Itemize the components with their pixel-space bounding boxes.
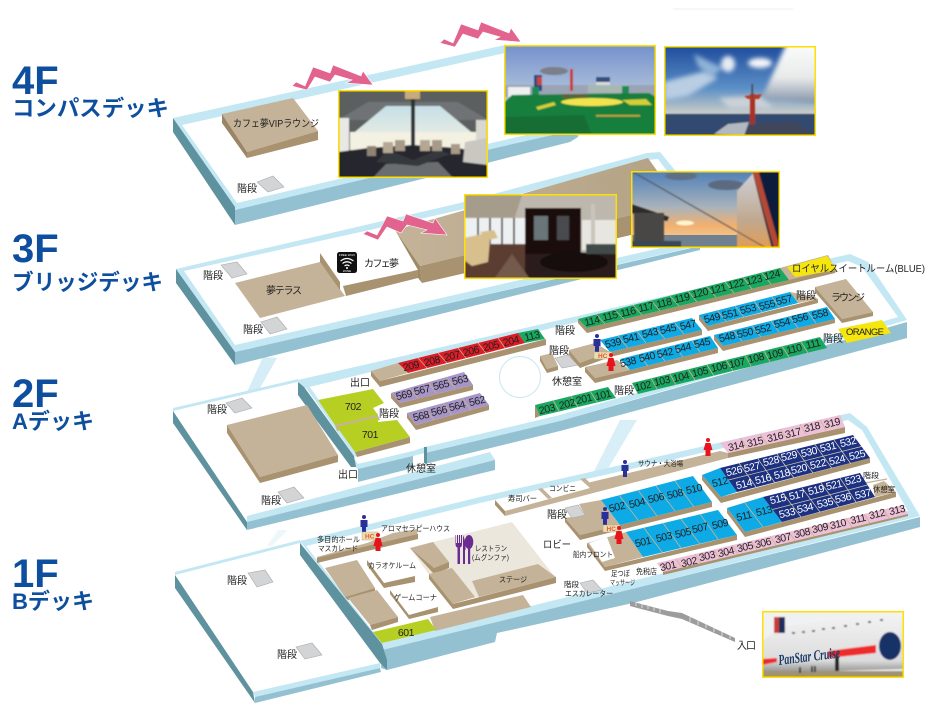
1F labels: 階段 <box>564 579 579 589</box>
arrow: to deck photos <box>440 22 521 47</box>
cabin block 511-537: 536 <box>834 491 853 506</box>
red row 209-204 with 113 <box>371 329 546 387</box>
1F labels: マスカレード <box>318 544 358 553</box>
room 601 <box>373 619 436 643</box>
support strut 3F to 2F <box>247 357 277 392</box>
blue row 548-558: 558 <box>811 307 830 322</box>
deck: 1F B deck <box>175 413 920 703</box>
support strut 2F to 1F left <box>267 530 288 546</box>
green row 102-111: 106 <box>710 360 729 375</box>
green row 102-111: 109 <box>766 347 785 362</box>
block 501-509: 507 <box>691 521 710 536</box>
blue row 549-557: 555 <box>758 298 777 313</box>
green row 114-124 with royal suite: 119 <box>673 291 692 306</box>
blue row 538-545 <box>585 336 718 383</box>
pink row 301-313: 304 <box>717 545 736 560</box>
blue row 538-545: 540 <box>638 350 657 365</box>
1F labels: サウナ・大浴場 <box>638 458 683 468</box>
cabin block 512 and 514-532: 524 <box>828 453 847 468</box>
heading: 2F: Aデッキ <box>12 409 94 434</box>
blue row 538-545: 538 <box>619 355 638 370</box>
deck: 4F compass deck <box>173 45 590 225</box>
sushi bar and convenience store strip <box>495 451 728 516</box>
pink row 301-313: 303 <box>698 549 717 564</box>
cafe yume room <box>320 230 418 296</box>
purple row 569-563: 569 <box>395 388 414 403</box>
lounge block <box>815 279 873 323</box>
pink row 314-319: 319 <box>823 416 842 431</box>
1F labels: マッサージ <box>610 578 635 587</box>
large beige block <box>227 405 338 483</box>
block 501-509: 503 <box>655 530 674 545</box>
cabin block 511-537: 519 <box>807 483 826 498</box>
cafe back block <box>395 158 660 283</box>
green row 102-111: 103 <box>653 374 672 389</box>
beige rooms 1F <box>317 529 556 631</box>
blue row 548-558: 556 <box>791 311 810 326</box>
block 502-510: 506 <box>647 491 666 506</box>
1F labels: ゲームコーナ <box>394 593 437 602</box>
green row 102-111: 108 <box>747 351 766 366</box>
heading: 3F: 3F <box>12 227 59 271</box>
1F labels: 多目的ホール <box>317 534 360 544</box>
pink row 301-313: 305 <box>736 540 755 555</box>
arrow: to VIP lounge photo <box>292 65 373 90</box>
purple row 568-562: 568 <box>412 409 431 424</box>
2F main deck structure <box>298 254 907 482</box>
1F labels: 船内フロント <box>573 549 613 559</box>
cabin block 512 and 514-532: 529 <box>780 449 799 464</box>
pink row 314-319: 314 <box>727 439 746 454</box>
blue row 538-545: 542 <box>656 346 675 361</box>
VIP lounge block <box>222 98 319 158</box>
block 502-510: 502 <box>608 500 627 515</box>
red row 209-204 with 113: 207 <box>443 349 462 364</box>
2F labels <box>207 263 925 507</box>
3F labels: 階段 <box>243 323 263 336</box>
small block by stairs <box>540 353 558 373</box>
2F labels: 休憩室 <box>552 375 582 388</box>
red row 209-204 with 113: 113 <box>523 329 542 344</box>
2F labels: 階段 <box>796 289 816 302</box>
pink row 301-313: 312 <box>868 507 887 522</box>
green row 203-101: 201 <box>575 392 594 407</box>
heading: 4F <box>12 59 169 121</box>
green row 114-124 with royal suite: 124 <box>763 268 782 283</box>
pink row 314-319: 317 <box>784 426 803 441</box>
heading: 2F: 2F <box>12 372 59 416</box>
block 502-510: 504 <box>628 496 647 511</box>
cabin block 512 and 514-532: 520 <box>790 462 809 477</box>
pink row 301-313: 311 <box>849 512 868 527</box>
blue row 548-558 <box>714 307 835 351</box>
red row 209-204 with 113: 208 <box>423 354 442 369</box>
restaurant floor <box>410 522 555 604</box>
block 502-510 <box>565 476 712 540</box>
photo: cafe interior <box>459 189 622 284</box>
pink row 314-319: 318 <box>803 420 822 435</box>
cabin block 512 and 514-532: 527 <box>743 460 762 475</box>
cabin block 512 and 514-532: 531 <box>819 440 838 455</box>
1F labels: 階段 <box>863 470 880 480</box>
cabin block 512 and 514-532: 518 <box>773 467 792 482</box>
lounge block: ラウンジ <box>831 292 865 304</box>
cabin block 512 and 514-532: 528 <box>762 454 781 469</box>
blue row 549-557 <box>699 292 818 331</box>
pink row 301-313: 302 <box>680 555 699 570</box>
cabin block 512 and 514-532: 522 <box>809 457 828 472</box>
green row 102-111: 107 <box>728 356 747 371</box>
green row 102-111: 111 <box>805 337 822 352</box>
pink row 301-313: 308 <box>793 526 812 541</box>
cabin block 512 and 514-532: 525 <box>848 448 867 463</box>
2F labels: 階段 <box>379 407 399 420</box>
heading: 1F <box>12 552 94 614</box>
pink row 314-319: 316 <box>766 430 785 445</box>
green row 114-124 with royal suite: 115 <box>601 309 620 324</box>
support strut 2F to 1F <box>592 420 637 475</box>
blue row 539-547: 541 <box>622 331 641 346</box>
1F labels: アロマセラピーハウス <box>381 524 450 533</box>
blue row 539-547: 547 <box>679 318 698 333</box>
stairs 3F <box>221 262 287 334</box>
deck: 3F bridge deck <box>176 152 720 365</box>
rooms 702 and 701: 702 <box>345 401 362 413</box>
block 502-510: 508 <box>666 487 685 502</box>
blue row 539-547: 543 <box>641 326 660 341</box>
cabin block 511-537: 513 <box>755 504 774 519</box>
purple row 568-562: 566 <box>430 404 449 419</box>
blue row 549-557: 549 <box>703 311 722 326</box>
3F deck structure <box>176 152 720 365</box>
purple row 569-563: 563 <box>451 373 470 388</box>
cabin block 511-537: 537 <box>854 487 873 502</box>
1F labels: ロビー <box>543 539 571 551</box>
cabin block 512 and 514-532: 532 <box>839 435 858 450</box>
stairs 4F: 階段 <box>237 182 257 195</box>
photo: PanStar Cruise ship: PanStar Cruise <box>778 646 841 669</box>
green row 102-111 <box>632 337 827 394</box>
block 501-509: 501 <box>634 535 653 550</box>
purple row 569-563: 565 <box>432 378 451 393</box>
stairs 2F <box>226 355 578 503</box>
icon: restrooms 2F: HC <box>598 353 608 360</box>
green row 203-101: 101 <box>594 388 613 403</box>
orange suite: ORANGE <box>846 327 884 338</box>
2F labels: 出口 <box>338 469 358 481</box>
pink row 301-313: 313 <box>888 503 907 518</box>
icon: restroom sauna women <box>704 438 712 456</box>
stairs 4F <box>237 176 284 195</box>
3F labels <box>203 269 263 336</box>
red row 209-204 with 113: 209 <box>402 359 421 374</box>
heading: 4F: コンパスデッキ <box>12 96 169 121</box>
block 501-509 <box>587 510 737 571</box>
pink row 301-313: 310 <box>829 517 848 532</box>
photo: green deck <box>499 40 661 140</box>
1F labels: 階段 <box>227 574 247 587</box>
2F labels: 階段 <box>207 403 227 416</box>
pink row 314-319 <box>720 415 845 458</box>
green row 114-124 with royal suite: 116 <box>619 305 638 320</box>
pink row 301-313: 307 <box>774 531 793 546</box>
icon: restroom sauna men <box>622 460 628 477</box>
icon: restrooms 2F <box>594 334 616 371</box>
blue row 548-558: 548 <box>718 330 737 345</box>
icon: restrooms center: HC <box>606 526 616 533</box>
heading: 3F <box>12 227 163 295</box>
green row 102-111: 105 <box>691 365 710 380</box>
green row 203-101: 202 <box>558 397 577 412</box>
2F labels: 階段 <box>555 324 575 337</box>
1F labels: 階段 <box>547 508 567 521</box>
2F labels: 階段 <box>549 344 569 357</box>
blue row 539-547 <box>569 318 702 368</box>
room 601: 601 <box>398 627 415 639</box>
1F labels: 足つぼ <box>611 569 630 578</box>
1F labels <box>227 458 895 661</box>
cabin block 512 and 514-532: 526 <box>725 464 744 479</box>
heading: 4F: 4F <box>12 59 59 103</box>
green row 114-124 with royal suite: 117 <box>637 300 656 315</box>
1F labels: 免税店 <box>636 566 657 576</box>
cafe yume room: カフェ夢 <box>364 257 399 270</box>
1F labels: (ムグンファ) <box>472 552 509 562</box>
pink row 314-319: 315 <box>746 435 765 450</box>
cabin block 511-537: 517 <box>788 488 807 503</box>
heading: 1F: Bデッキ <box>12 589 94 614</box>
green row 102-111: 102 <box>634 379 653 394</box>
pink row 301-313: 309 <box>811 521 830 536</box>
deck: 2F A deck <box>173 254 925 530</box>
green row 114-124 with royal suite <box>578 255 837 333</box>
cabin block 512 and 514-532 <box>702 435 870 503</box>
icon: wifi <box>337 252 357 273</box>
icon: restrooms left: HC <box>365 534 375 540</box>
block 501-509: 505 <box>674 526 693 541</box>
cabin block 511-537: 521 <box>825 478 844 493</box>
dream terrace: 夢テラス <box>266 284 302 297</box>
1F labels: 休憩室 <box>873 484 895 494</box>
rooms 702 and 701 <box>318 389 410 457</box>
green row 203-101: 203 <box>538 402 557 417</box>
blue row 548-558: 554 <box>773 316 792 331</box>
blue row 538-545: 544 <box>674 341 693 356</box>
4F deck structure <box>173 45 590 225</box>
2F labels: ロイヤルスイートルーム(BLUE) <box>792 263 925 275</box>
icon: wifi: FREE WI-FI <box>339 253 355 257</box>
green row 114-124 with royal suite: 121 <box>709 282 728 297</box>
2F labels: 階段 <box>261 494 281 507</box>
purple row 568-562: 562 <box>468 394 487 409</box>
blue row 539-547: 545 <box>659 322 678 337</box>
green row 114-124 with royal suite: 122 <box>727 277 746 292</box>
dream terrace <box>235 262 345 318</box>
pink row 301-313 <box>657 503 908 575</box>
blue row 539-547: 539 <box>604 336 623 351</box>
purple row 568-562: 564 <box>448 399 467 414</box>
icon: wifi: ZONE <box>343 269 351 273</box>
icon: cutlery <box>456 535 473 564</box>
cabin block 511-537: 511 <box>735 509 754 524</box>
stairs 1F <box>248 570 602 659</box>
2F labels: 階段 <box>823 332 843 345</box>
1F left deck structure <box>175 540 382 703</box>
green row 102-111: 110 <box>785 342 804 357</box>
green row 114-124 with royal suite: 120 <box>691 286 710 301</box>
block 501-509: 509 <box>711 517 730 532</box>
cabin block 511-537 <box>727 473 896 537</box>
block 502-510: 510 <box>685 482 704 497</box>
rooms 702 and 701: 701 <box>362 429 379 441</box>
cabin block 512 and 514-532: 514 <box>735 477 754 492</box>
green row 114-124 with royal suite: 123 <box>745 273 764 288</box>
central atrium circle <box>500 356 540 398</box>
3F labels: 階段 <box>203 269 223 282</box>
orange suite <box>838 320 891 343</box>
blue row 549-557: 551 <box>721 307 740 322</box>
heading: 2F <box>12 372 94 434</box>
2F left deck structure <box>173 379 495 530</box>
green row 114-124 with royal suite: 114 <box>583 314 602 329</box>
green row 102-111: 104 <box>672 370 691 385</box>
1F labels: 階段 <box>277 648 297 661</box>
heading: 3F: ブリッジデッキ <box>12 270 163 295</box>
cabin block 511-537: 534 <box>796 501 815 516</box>
photo: mast and sky <box>659 38 824 141</box>
blue row 549-557: 557 <box>775 293 794 308</box>
cabin block 512 and 514-532: 516 <box>754 472 773 487</box>
red row 209-204 with 113: 204 <box>502 334 521 349</box>
photo: PanStar Cruise ship <box>757 606 909 683</box>
1F labels: コンビニ <box>549 484 576 493</box>
pink row 301-313: 301 <box>659 559 678 574</box>
1F labels: エスカレーター <box>565 589 613 598</box>
purple row 568-562 <box>407 393 489 430</box>
purple row 569-563 <box>391 372 473 408</box>
1F labels: 寿司バー <box>508 493 537 503</box>
cabin block 512 and 514-532: 530 <box>800 445 819 460</box>
photo: sunset deck <box>626 166 786 253</box>
blue row 549-557: 553 <box>739 302 758 317</box>
label: entrance: 入口 <box>737 641 756 652</box>
icon: restrooms center <box>602 507 624 544</box>
2F labels: 階段 <box>614 384 634 397</box>
pink row 301-313: 306 <box>754 536 773 551</box>
1F labels: ステージ <box>499 575 527 584</box>
1F labels: レストラン <box>475 544 507 553</box>
2F labels: 出口 <box>350 377 370 389</box>
2F labels: 休憩室 <box>406 462 436 475</box>
purple row 569-563: 567 <box>413 383 432 398</box>
faint top line <box>673 8 793 10</box>
cabin block 511-537: 515 <box>769 492 788 507</box>
blue row 548-558: 552 <box>754 322 773 337</box>
green row 203-101 <box>535 387 616 418</box>
blue row 538-545: 545 <box>693 336 712 351</box>
photo: VIP lounge <box>333 85 493 183</box>
cabin block 512 and 514-532: 512 <box>711 475 730 490</box>
cabin block 511-537: 535 <box>816 496 835 511</box>
cabin block 511-537: 533 <box>778 506 797 521</box>
red row 209-204 with 113: 205 <box>482 339 501 354</box>
1F main deck structure <box>300 413 920 670</box>
blue row 548-558: 550 <box>736 326 755 341</box>
green row 114-124 with royal suite: 118 <box>655 296 674 311</box>
gangway <box>630 601 735 642</box>
icon: restrooms left <box>360 515 382 551</box>
1F labels: カラオケルーム <box>368 561 416 570</box>
arrow: to cafe photo <box>363 214 447 240</box>
heading: 1F: 1F <box>12 552 59 596</box>
cabin block 511-537: 523 <box>844 473 863 488</box>
VIP lounge block: カフェ夢VIPラウンジ <box>233 117 319 130</box>
red row 209-204 with 113: 206 <box>462 344 481 359</box>
